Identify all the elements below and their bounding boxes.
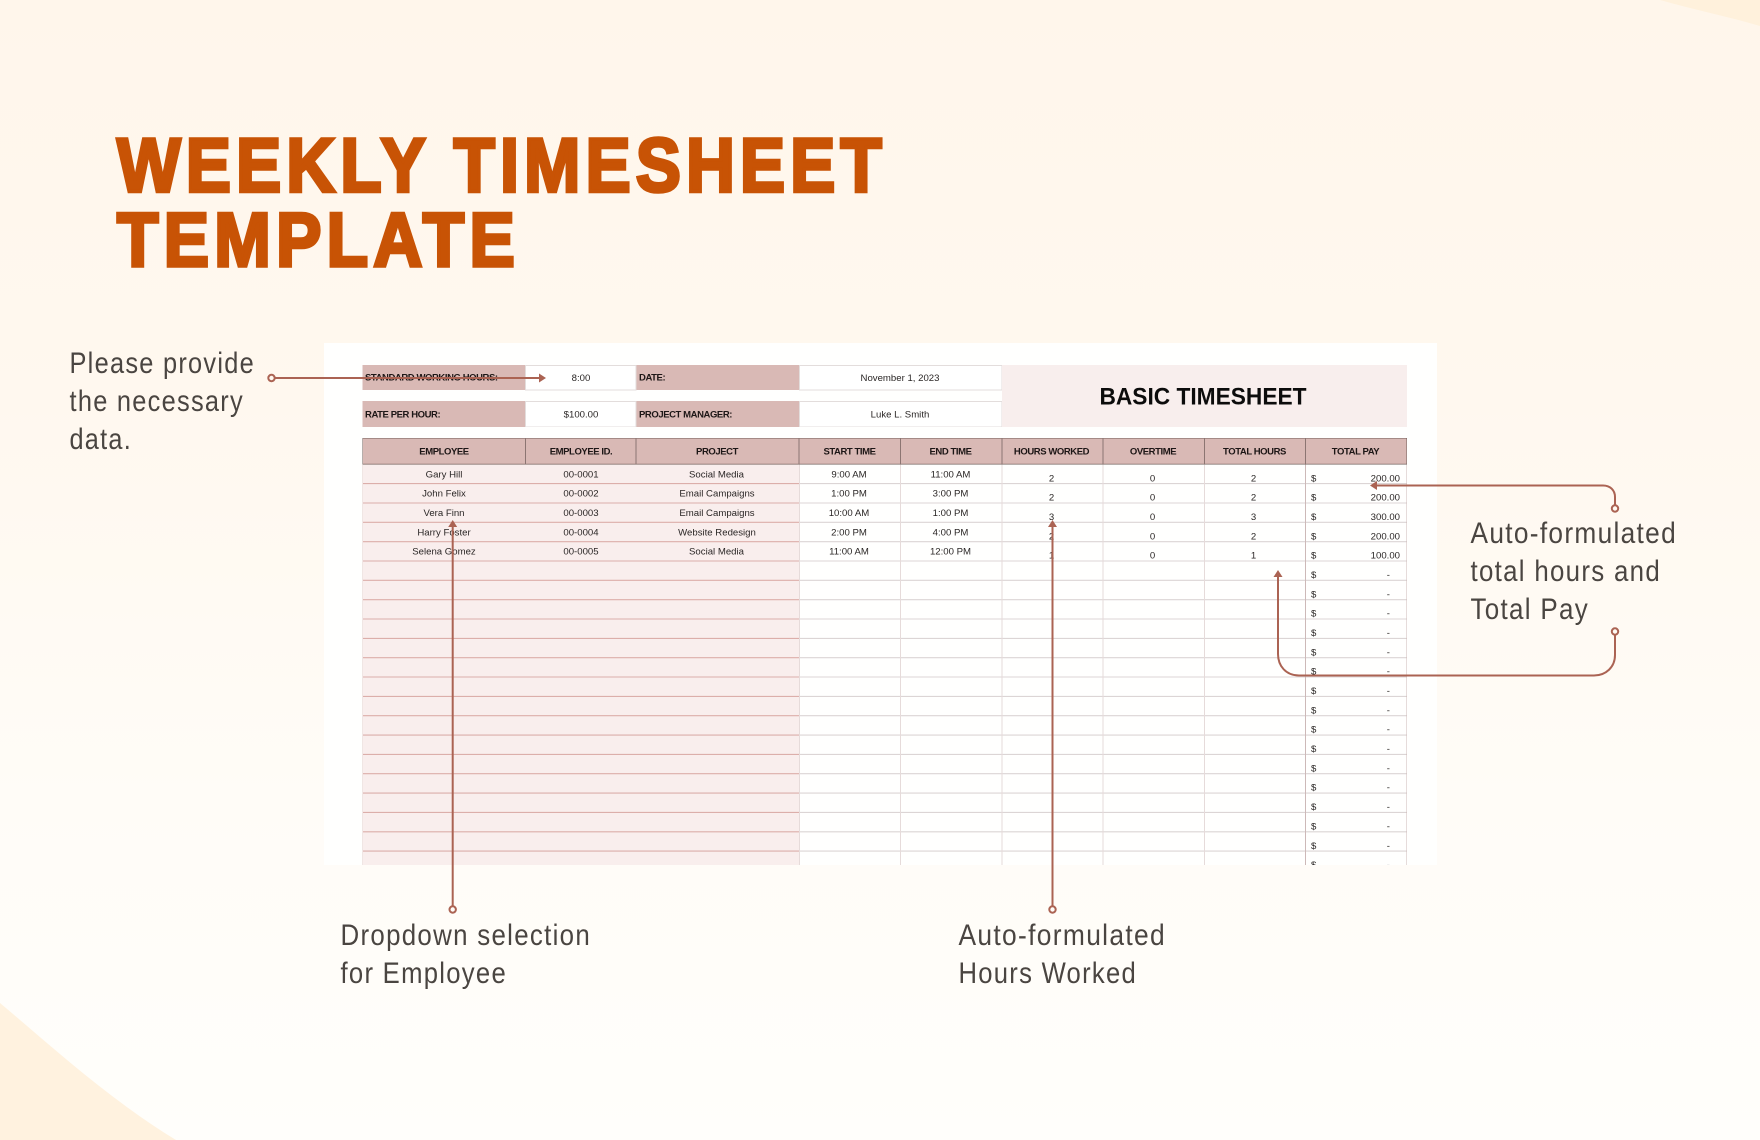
row: John Felix: 2 [1049, 493, 1054, 504]
settings fields [362, 365, 1002, 427]
total pay column: - [1387, 763, 1390, 774]
callout text: please provide the necessary data: data. [70, 423, 132, 456]
callout text: auto-formulated total hours and total pay: Total Pay [1470, 593, 1589, 626]
total pay column: - [1387, 802, 1390, 813]
total pay column: $ [1311, 841, 1317, 852]
total pay column: $ [1311, 512, 1317, 523]
total pay column: 100.00 [1371, 551, 1400, 562]
total pay column: $ [1311, 860, 1317, 871]
table header [362, 438, 1407, 464]
row: Harry Foster: 4:00 PM [933, 527, 968, 538]
sheet title: basic timesheet [1002, 365, 1407, 427]
row: Harry Foster [418, 529, 1256, 540]
row: Selena Gomez: 1 [1049, 551, 1054, 562]
decorative corner: bottom left [0, 1003, 176, 1140]
total pay column: - [1387, 647, 1390, 658]
row: Gary Hill: 2 [1251, 473, 1256, 484]
settings fields: RATE PER HOUR: [365, 409, 440, 420]
row: Gary Hill: 11:00 AM [931, 469, 970, 480]
total pay column: $ [1311, 705, 1317, 716]
total pay column: $ [1311, 744, 1317, 755]
row: Vera Finn [424, 510, 1256, 520]
row: Harry Foster: 2 [1251, 531, 1256, 542]
total pay column: - [1387, 570, 1390, 581]
total pay column: $ [1311, 589, 1317, 600]
row: Selena Gomez [412, 548, 1256, 558]
callout text: dropdown selection for employee: Dropdown selection [340, 919, 591, 952]
total pay column: - [1387, 860, 1390, 871]
arrow: to hours worked column [1048, 520, 1057, 913]
row: John Felix: 00-0002 [563, 489, 599, 500]
settings fields: STANDARD WORKING HOURS: [365, 372, 498, 384]
total pay column: 200.00 [1371, 493, 1400, 504]
row: Selena Gomez: 0 [1150, 551, 1155, 562]
settings fields: November 1, 2023 [861, 373, 939, 384]
row: Vera Finn: 00-0003 [563, 508, 599, 519]
row: John Felix [422, 490, 1256, 500]
total pay column: $ [1311, 783, 1317, 794]
total pay column: - [1387, 725, 1390, 736]
total pay column: $ [1311, 628, 1317, 639]
total pay column: $ [1311, 725, 1317, 736]
total pay column: $ [1311, 473, 1317, 484]
total pay column: 300.00 [1371, 512, 1400, 523]
callout text: dropdown selection for employee: for Employee [340, 957, 507, 990]
row: Harry Foster: 2 [1049, 531, 1054, 542]
total pay column: $ [1311, 531, 1317, 542]
row: Harry Foster: 0 [1150, 531, 1155, 542]
table header: OVERTIME [1130, 446, 1176, 458]
total pay column: $ [1311, 763, 1317, 774]
row: Selena Gomez: 11:00 AM [829, 547, 869, 558]
settings fields: PROJECT MANAGER: [639, 409, 732, 420]
row: Gary Hill: Gary Hill [426, 469, 462, 480]
total pay column: $ [1311, 493, 1317, 504]
arrow: to standard working hours [268, 374, 546, 382]
total pay column: - [1387, 628, 1390, 639]
callout text: please provide the necessary data [70, 347, 255, 456]
total pay column: 200.00 [1371, 473, 1400, 484]
total pay column: $ [1311, 821, 1317, 832]
callout text: dropdown selection for employee [340, 919, 591, 990]
total pay column: $ [1311, 647, 1317, 658]
callout text: auto-formulated total hours and total pay: Auto-formulated [1470, 517, 1677, 550]
table header: EMPLOYEE ID. [550, 446, 612, 458]
row: Vera Finn: 3 [1251, 512, 1256, 523]
table grid [362, 464, 1407, 865]
title: TEMPLATE [117, 198, 520, 283]
row: Gary Hill: 2 [1049, 473, 1054, 484]
total pay column: - [1387, 744, 1390, 755]
row: Selena Gomez: 00-0005 [563, 547, 599, 558]
row: Harry Foster: Website Redesign [678, 527, 756, 538]
total pay column: $ [1311, 609, 1317, 620]
row: Harry Foster: 2:00 PM [831, 527, 867, 538]
total pay column: - [1387, 667, 1390, 678]
row: Vera Finn: 10:00 AM [829, 508, 869, 519]
title [117, 123, 887, 283]
row: Selena Gomez: 12:00 PM [930, 547, 971, 558]
row: John Felix: 2 [1251, 493, 1256, 504]
callout text: auto-formulated total hours and total pay: total hours and [1470, 555, 1661, 588]
row: John Felix: John Felix [422, 489, 466, 500]
total pay column: - [1387, 821, 1390, 832]
row: John Felix: 3:00 PM [933, 489, 968, 500]
total pay column: - [1387, 783, 1390, 794]
total pay column: 200.00 [1371, 531, 1400, 542]
total pay column: $ [1311, 667, 1317, 678]
arrow: to total hours [1274, 570, 1618, 676]
arrow: to employee column [448, 520, 457, 913]
total pay column: $ [1311, 802, 1317, 813]
row: Harry Foster: 00-0004 [563, 527, 599, 538]
table header: END TIME [929, 446, 972, 458]
total pay column: $ [1311, 570, 1317, 581]
sheet title: basic timesheet: BASIC TIMESHEET [1100, 383, 1307, 410]
decorative corner: top right [1660, 0, 1760, 26]
callout text: auto-formulated hours worked: Auto-formulated [958, 919, 1166, 952]
row: Vera Finn: 3 [1049, 512, 1054, 523]
settings fields: 8:00 [572, 373, 590, 384]
row: John Felix: 1:00 PM [831, 489, 867, 500]
total pay column: $ [1311, 551, 1317, 562]
row: John Felix: 0 [1150, 493, 1155, 504]
panel: timesheet [324, 343, 1437, 871]
callout text: auto-formulated hours worked [958, 919, 1166, 990]
callout text: auto-formulated total hours and total pay [1470, 517, 1677, 626]
row: Gary Hill: 00-0001 [563, 469, 599, 480]
table header: TOTAL HOURS [1223, 446, 1286, 458]
row: Vera Finn: 1:00 PM [933, 508, 968, 519]
callout text: please provide the necessary data: Please provide [70, 347, 255, 380]
settings fields: Luke L. Smith [871, 409, 929, 420]
row: Selena Gomez: Selena Gomez [412, 547, 476, 558]
row: Gary Hill [426, 471, 1256, 482]
callout text: auto-formulated hours worked: Hours Worked [958, 957, 1137, 990]
callout text: please provide the necessary data: the necessary [70, 385, 244, 418]
table header: TOTAL PAY [1332, 446, 1380, 458]
row: Gary Hill: Social Media [689, 469, 745, 480]
row: Vera Finn: Vera Finn [423, 508, 465, 519]
table header: EMPLOYEE [419, 446, 469, 458]
row: Vera Finn: 0 [1150, 512, 1155, 523]
total pay column [1311, 473, 1400, 871]
row: Gary Hill: 0 [1150, 473, 1155, 484]
total pay column: $ [1311, 686, 1317, 697]
row: Selena Gomez: 1 [1251, 551, 1256, 562]
settings fields: DATE: [639, 372, 665, 384]
total pay column: - [1387, 589, 1390, 600]
total pay column: - [1387, 609, 1390, 620]
title: WEEKLY TIMESHEET [117, 123, 887, 208]
total pay column: - [1387, 686, 1390, 697]
row: John Felix: Email Campaigns [679, 489, 755, 500]
table header: START TIME [823, 446, 876, 458]
table header: PROJECT [696, 446, 739, 458]
total pay column: - [1387, 705, 1390, 716]
row: Vera Finn: Email Campaigns [679, 508, 755, 519]
row: Selena Gomez: Social Media [689, 547, 745, 558]
row: Harry Foster: Harry Foster [417, 527, 471, 538]
table header: HOURS WORKED [1014, 446, 1090, 458]
arrow: to total pay [1370, 481, 1618, 512]
row: Gary Hill: 9:00 AM [831, 469, 867, 480]
total pay column: - [1387, 841, 1390, 852]
settings fields: $100.00 [564, 409, 598, 420]
